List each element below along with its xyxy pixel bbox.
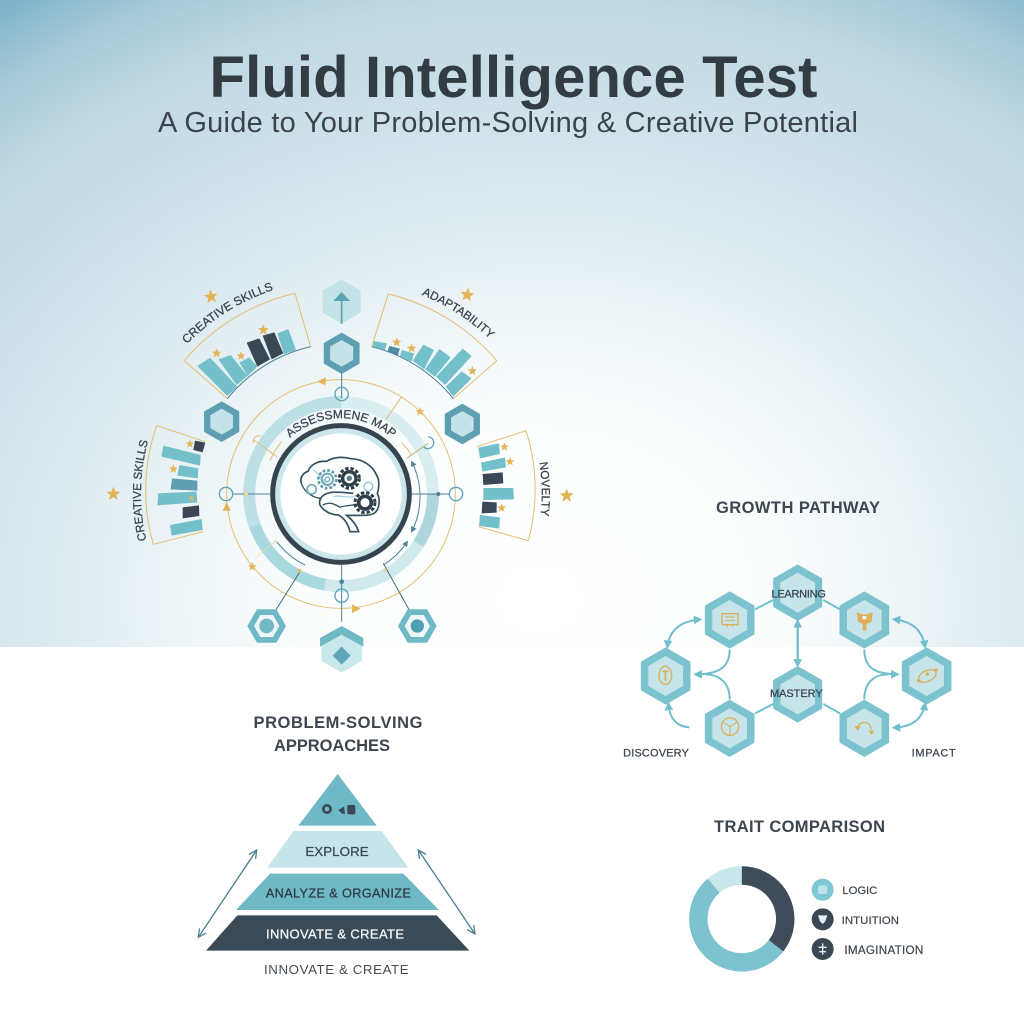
outer teal band ring xyxy=(249,402,433,586)
panel: creative skills top-left sector: CREATIVE SKILLS xyxy=(182,282,272,342)
arrow: left double-headed xyxy=(198,850,257,937)
connectors and arrows xyxy=(667,600,925,728)
label: impact: IMPACT xyxy=(912,747,956,759)
legend item: imagination: IMAGINATION xyxy=(844,944,923,957)
hexagon: learning: LEARNING xyxy=(771,589,826,601)
panel: creative skills top-left sector xyxy=(182,282,312,399)
icon: top arrow hexagon xyxy=(323,280,361,324)
heading: trait comparison: TRAIT COMPARISON xyxy=(714,818,885,836)
icon: bottom-left hexagon xyxy=(247,609,286,643)
pyramid tier: explore: EXPLORE xyxy=(305,844,369,859)
gold orbit ring with markers xyxy=(223,377,455,613)
hexagon: cycle icon xyxy=(840,700,889,757)
icon: right hexagon xyxy=(445,404,480,444)
pyramid tier: explore xyxy=(267,831,408,868)
hexagon: cube icon xyxy=(705,700,754,757)
icon: bottom-right hexagon xyxy=(398,609,437,643)
icon: upper hexagon xyxy=(324,333,360,374)
label: discovery: DISCOVERY xyxy=(623,747,690,759)
arrow: right double-headed xyxy=(418,850,475,934)
background gradient panel xyxy=(0,0,1024,647)
panel: adaptability top-right sector xyxy=(371,288,498,399)
icon: bottom diamond hexagon xyxy=(320,626,363,673)
panel: adaptability top-right sector: ADAPTABILITY xyxy=(422,288,496,337)
pyramid tier: analyze and organize: ANALYZE & ORGANIZE xyxy=(266,886,411,900)
hexagon: learning xyxy=(771,564,826,621)
hexagon: screen icon xyxy=(705,591,754,649)
subtitle: A Guide to Your Problem-Solving & Creative Potential xyxy=(158,107,858,139)
pyramid chart xyxy=(198,774,475,977)
panel: novelty right sector: NOVELTY xyxy=(539,462,550,517)
pyramid tier: top icons xyxy=(298,774,377,826)
panel: creative skills left sector: CREATIVE SKILLS xyxy=(132,440,148,541)
donut chart xyxy=(698,876,785,962)
assessment map radial diagram xyxy=(106,280,574,672)
caption: innovate and create: INNOVATE & CREATE xyxy=(264,962,409,977)
hexagon: mastery xyxy=(770,666,823,723)
panel: novelty right sector xyxy=(476,430,574,542)
legend item: logic: LOGIC xyxy=(842,885,877,897)
panel: creative skills left sector xyxy=(106,425,206,545)
heading: problem-solving approaches xyxy=(254,714,422,755)
hexagon: mastery: MASTERY xyxy=(770,688,823,700)
ring nodes xyxy=(219,387,463,602)
icon: brain with gears xyxy=(301,457,379,532)
spoke dots xyxy=(244,492,440,584)
growth pathway hex network xyxy=(623,564,956,759)
pyramid tier: innovate and create xyxy=(206,915,469,951)
pyramid tier: innovate and create: INNOVATE & CREATE xyxy=(266,926,404,941)
heading: growth pathway: GROWTH PATHWAY xyxy=(716,499,880,517)
hexagon: orbit icon xyxy=(902,647,951,705)
legend xyxy=(812,879,923,960)
assessment map label: ASSESSMENE MAP xyxy=(287,410,396,438)
legend item: intuition: INTUITION xyxy=(842,915,899,927)
heading: problem-solving approaches: APPROACHES xyxy=(274,737,390,755)
hexagon: shield icon xyxy=(641,647,690,705)
heading: problem-solving approaches: PROBLEM-SOLVING xyxy=(254,714,422,732)
title: Fluid Intelligence Test xyxy=(210,45,818,110)
pyramid tier: analyze and organize xyxy=(236,874,439,910)
hexagon: trophy icon xyxy=(840,591,889,649)
core dark ring and brain background xyxy=(273,426,409,562)
icon: left hexagon xyxy=(204,401,239,442)
thin blue arcs and spokes xyxy=(233,364,449,625)
